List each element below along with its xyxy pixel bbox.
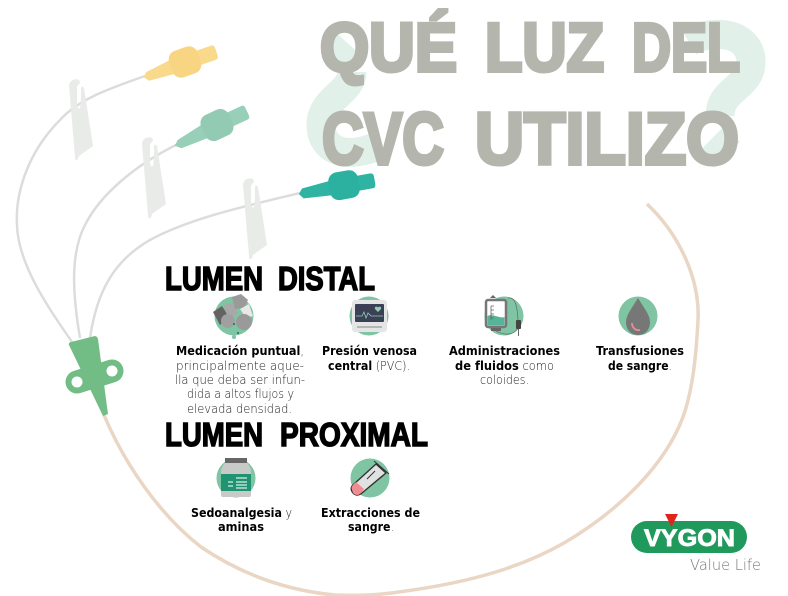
clamp 2	[142, 137, 166, 218]
heading: lumen distal: LUMEN	[165, 260, 263, 297]
text: presión venosa central: central (PVC).	[328, 358, 410, 373]
catheter hub	[69, 336, 118, 416]
catheter extension tubes	[17, 76, 300, 342]
icon: IV fluid bag	[484, 295, 524, 336]
heading: lumen proximal	[165, 416, 428, 453]
text: sedoanalgesia y aminas: Sedoanalgesia y	[191, 505, 292, 520]
text: administraciones de fluidos: Administraciones	[449, 343, 560, 358]
logo: vygon: Value Life	[690, 556, 761, 574]
text: transfusiones de sangre: de sangre.	[608, 358, 672, 373]
title	[320, 9, 740, 180]
logo: vygon: VYGON	[644, 525, 735, 552]
heading: lumen proximal: LUMEN	[165, 416, 263, 453]
clamp 1	[69, 79, 93, 160]
text: administraciones de fluidos: coloides.	[480, 372, 529, 387]
text: medicación puntual	[175, 343, 305, 416]
connector: yellow	[139, 38, 221, 90]
title: DEL	[632, 9, 740, 86]
title: CVC	[322, 99, 444, 180]
text: administraciones de fluidos: de fluidos como	[455, 358, 554, 373]
background question marks	[321, 34, 751, 160]
icon: blood test tube	[350, 458, 390, 498]
icon: pills	[213, 294, 254, 339]
text: extracciones de sangre: sangre.	[348, 519, 394, 534]
title: UTILIZO	[475, 99, 739, 180]
text: sedoanalgesia y aminas	[191, 505, 292, 534]
icon: monitor	[350, 296, 388, 336]
title: LUZ	[485, 9, 604, 86]
text: medicación puntual: dida a altos flujos y	[187, 386, 294, 401]
title: QUÉ	[320, 9, 457, 86]
text: administraciones de fluidos	[449, 343, 560, 387]
text: medicación puntual: elevada densidad.	[187, 401, 292, 416]
text: medicación puntual: Medicación puntual,	[176, 343, 304, 358]
heading: lumen proximal: PROXIMAL	[280, 416, 428, 453]
heading: lumen distal	[165, 260, 375, 297]
clamp 3	[243, 178, 267, 259]
text: transfusiones de sangre: Transfusiones	[596, 343, 684, 358]
logo: vygon	[631, 514, 761, 574]
text: sedoanalgesia y aminas: aminas	[218, 519, 264, 534]
connector: teal	[296, 166, 377, 207]
icon: blood drop	[618, 296, 658, 336]
text: extracciones de sangre	[321, 505, 420, 534]
text: medicación puntual: lla que deba ser infun-	[175, 372, 305, 387]
text: presión venosa central	[322, 343, 417, 373]
text: presión venosa central: Presión venosa	[322, 343, 417, 358]
heading: lumen distal: DISTAL	[278, 260, 375, 297]
text: medicación puntual: principalmente aque-	[176, 358, 304, 373]
text: extracciones de sangre: Extracciones de	[321, 505, 420, 520]
catheter main tube	[104, 204, 698, 595]
text: transfusiones de sangre	[596, 343, 684, 373]
icon: medicine bottle	[216, 458, 256, 498]
connector: green	[168, 98, 253, 158]
